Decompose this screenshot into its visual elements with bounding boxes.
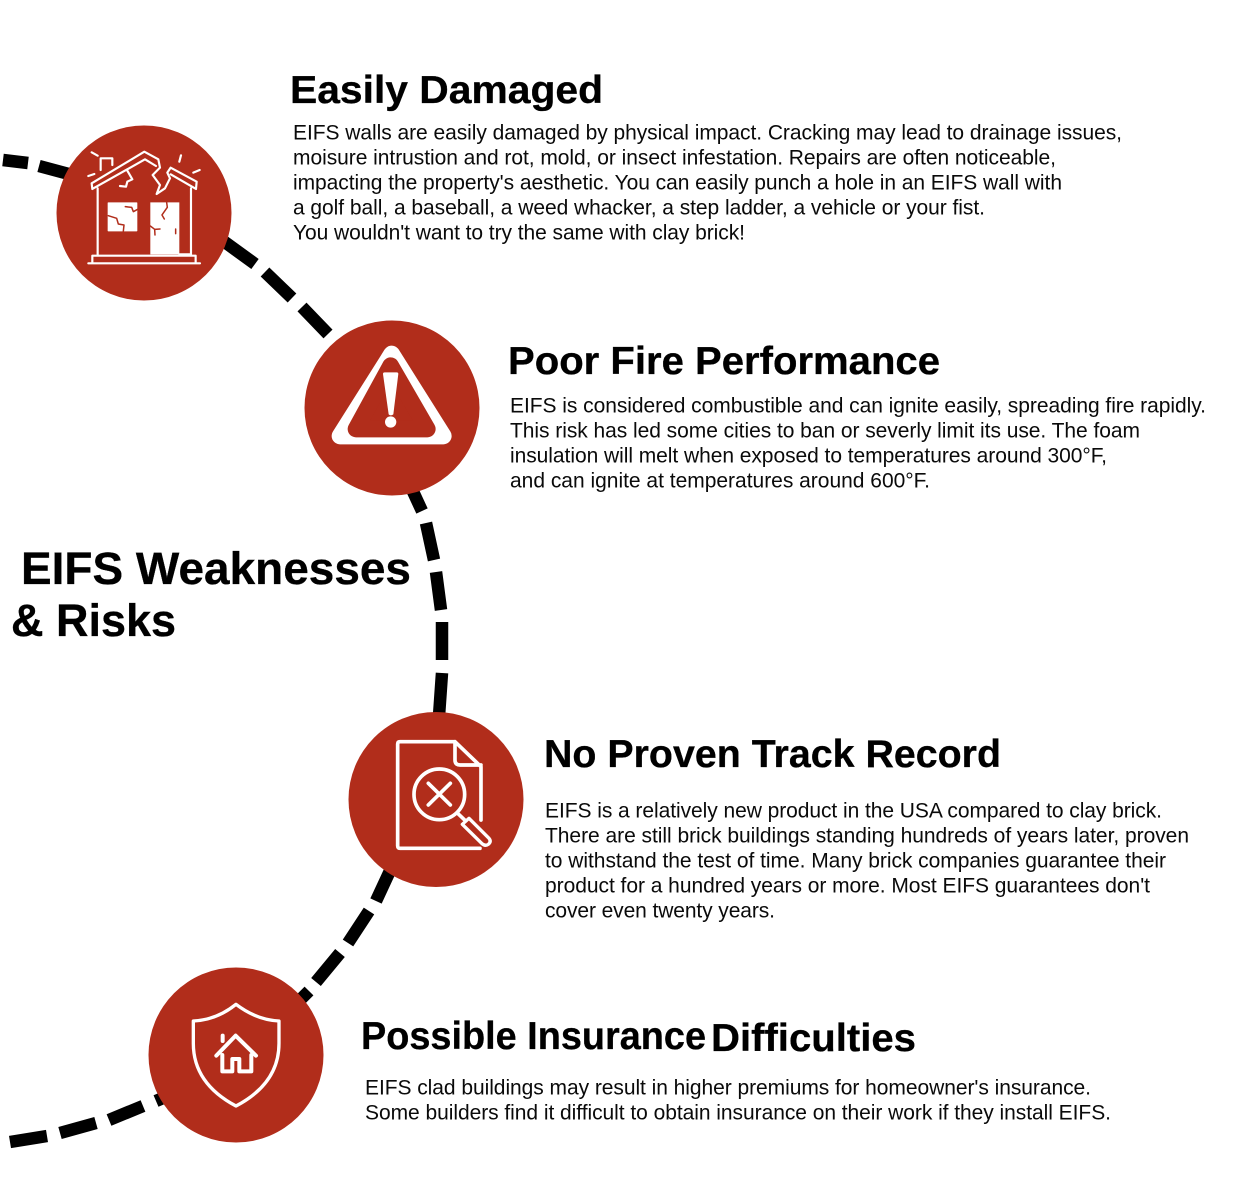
body text: to withstand the test of time. Many brick companies guarantee their	[545, 850, 1166, 872]
dashed timeline arc	[3, 160, 442, 1142]
icon: document with magnifier	[348, 712, 524, 887]
body text: This risk has led some cities to ban or severly limit its use. The foam	[510, 420, 1140, 442]
heading: Easily Damaged	[290, 69, 603, 112]
title: & Risks	[11, 595, 176, 646]
body text	[545, 800, 1189, 922]
title	[11, 543, 411, 646]
title: EIFS Weaknesses	[21, 543, 411, 594]
heading: Possible Insurance	[361, 1015, 706, 1058]
body text: and can ignite at temperatures around 600°F.	[510, 470, 930, 492]
body text: insulation will melt when exposed to temperatures around 300°F,	[510, 444, 1107, 468]
section: Poor Fire Performance	[304, 320, 1206, 496]
icon: warning triangle	[304, 320, 480, 496]
body text: moisure intrustion and rot, mold, or insect infestation. Repairs are often noticeable,	[293, 146, 1056, 170]
icon: damaged house	[56, 126, 232, 300]
icon: shield with house	[148, 968, 324, 1142]
body text: EIFS is a relatively new product in the USA compared to clay brick.	[545, 800, 1162, 822]
body text: EIFS is considered combustible and can ignite easily, spreading fire rapidly.	[510, 394, 1206, 418]
body text: Some builders find it difficult to obtain insurance on their work if they install EIFS.	[365, 1102, 1111, 1124]
body text: product for a hundred years or more. Most EIFS guarantees don't	[545, 874, 1150, 898]
body text	[293, 122, 1122, 244]
body text: EIFS walls are easily damaged by physical impact. Cracking may lead to drainage issues,	[293, 122, 1122, 144]
body text: cover even twenty years.	[545, 900, 775, 922]
body text: a golf ball, a baseball, a weed whacker, a step ladder, a vehicle or your fist.	[293, 196, 985, 220]
body text	[365, 1076, 1111, 1124]
body text: EIFS clad buildings may result in higher premiums for homeowner's insurance.	[365, 1076, 1091, 1100]
body text: You wouldn't want to try the same with clay brick!	[293, 222, 745, 244]
body text: There are still brick buildings standing hundreds of years later, proven	[545, 824, 1189, 848]
heading	[361, 1015, 916, 1060]
body text	[510, 394, 1206, 492]
section: Possible Insurance Difficulties	[148, 968, 1111, 1142]
section: Easily Damaged	[56, 69, 1122, 300]
section: No Proven Track Record	[348, 712, 1189, 922]
body text: impacting the property's aesthetic. You can easily punch a hole in an EIFS wall with	[293, 172, 1062, 194]
heading: Poor Fire Performance	[508, 340, 940, 383]
heading: Difficulties	[711, 1017, 916, 1060]
heading: No Proven Track Record	[544, 733, 1001, 776]
